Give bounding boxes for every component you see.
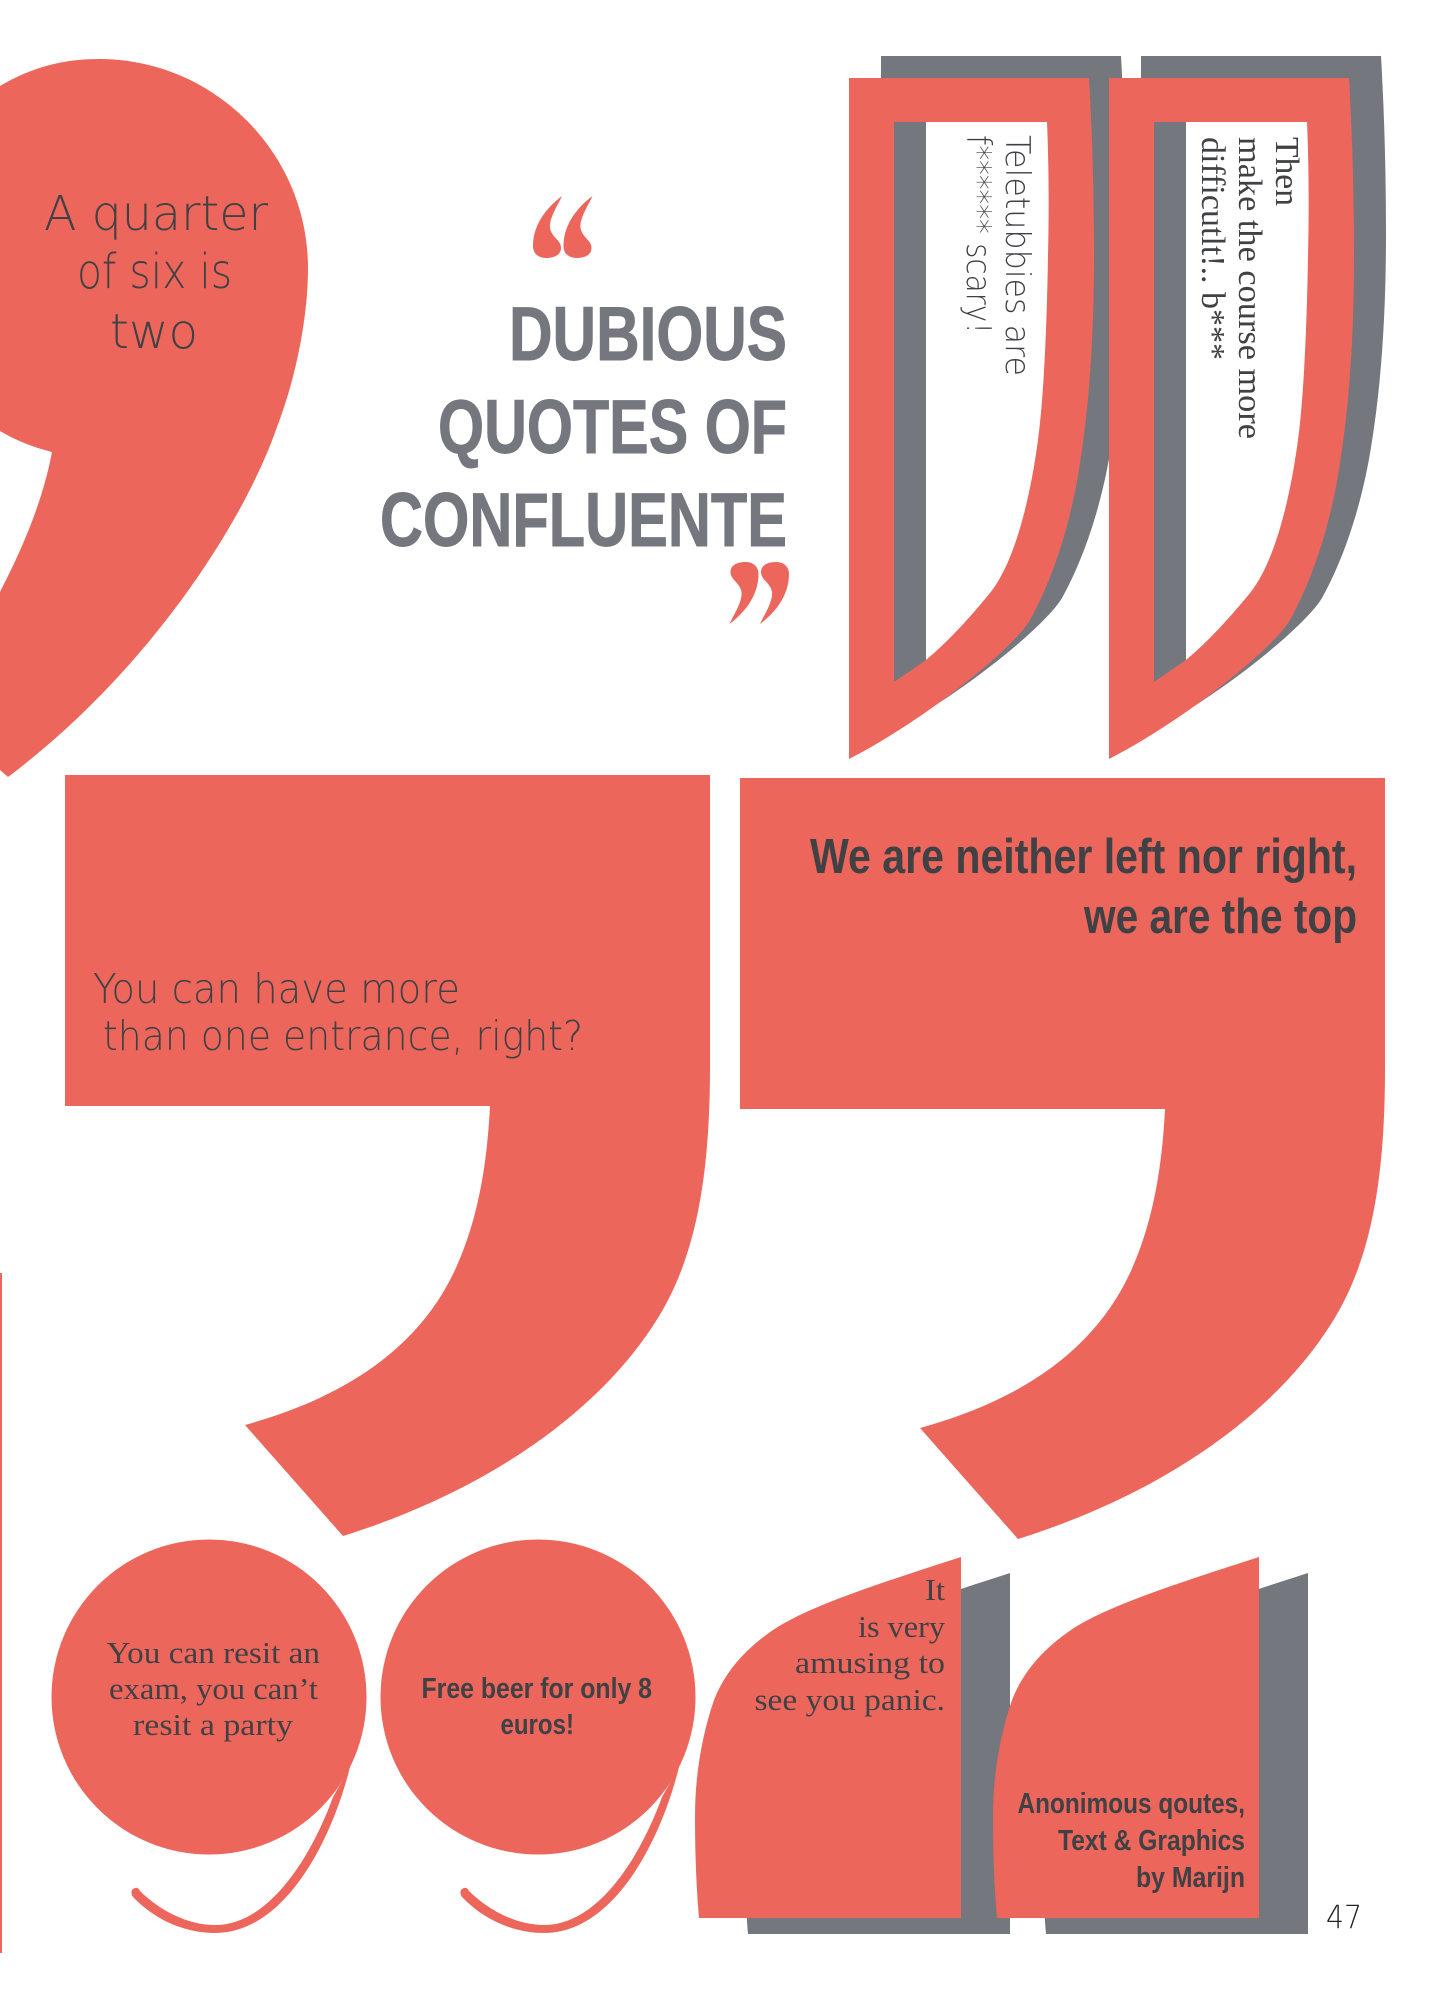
panel: outlined quote mark, course <box>1109 56 1386 759</box>
quote: a quarter of six is two <box>44 186 268 360</box>
panel: opening mark, credits <box>993 1557 1308 1934</box>
page number: 47 <box>1326 1898 1362 1936</box>
grey shadow shape <box>744 1573 1010 1934</box>
quote: free beer <box>422 1673 652 1741</box>
title text <box>380 292 787 563</box>
quote: more than one entrance <box>93 965 583 1060</box>
quote mark tail <box>131 1767 350 1933</box>
quote: make the course more difficult: make the course more <box>1231 137 1268 439</box>
panel: round quote, resit <box>52 1540 366 1933</box>
quote mark circle <box>380 1540 696 1854</box>
grey shadow shape <box>881 56 1126 737</box>
comma shape <box>740 778 1385 1539</box>
quote: a quarter of six is two: of six is <box>77 244 232 300</box>
left edge line <box>0 1273 2 1953</box>
credits text: Text & Graphics <box>1058 1825 1245 1857</box>
big comma shape <box>0 59 308 777</box>
panel: big comma with quote <box>0 59 308 777</box>
panel: round quote, free beer <box>380 1540 696 1933</box>
icon: opening quote mark <box>533 196 592 258</box>
quote: resit a party: exam, you can’t <box>109 1671 318 1706</box>
quote: make the course more difficult: Then <box>1268 137 1305 206</box>
quote: teletubbies: Teletubbies are <box>997 135 1037 376</box>
title text: DUBIOUS <box>509 292 787 377</box>
quote: more than one entrance: You can have more <box>93 965 460 1013</box>
quote: see you panic: see you panic. <box>754 1682 945 1717</box>
quote: free beer: euros! <box>500 1709 574 1741</box>
red outlined shape <box>1109 78 1354 759</box>
grey shadow shape <box>1042 1573 1308 1934</box>
quote: more than one entrance: than one entrance, right? <box>103 1012 583 1060</box>
quote mark tail <box>460 1767 679 1933</box>
red outlined shape <box>849 78 1094 759</box>
quote: teletubbies: f****** scary! <box>958 135 998 334</box>
red shape <box>993 1557 1259 1918</box>
icon: closing quote mark <box>730 562 789 624</box>
credits text <box>1018 1788 1245 1894</box>
quote: see you panic: is very <box>858 1609 946 1644</box>
credits text: by Marijn <box>1136 1862 1245 1894</box>
quote: see you panic: amusing to <box>795 1645 945 1680</box>
panel: large comma, left nor right <box>740 778 1385 1539</box>
quote: resit a party: resit a party <box>133 1707 294 1742</box>
credits text: Anonimous qoutes, <box>1018 1788 1245 1820</box>
quote: neither left nor right: we are the top <box>1083 890 1357 944</box>
quote: resit a party <box>106 1635 321 1742</box>
comma shape <box>65 775 710 1536</box>
red shape <box>695 1557 961 1918</box>
quote: teletubbies <box>958 135 1037 376</box>
quote: see you panic <box>754 1572 946 1717</box>
quote: resit a party: You can resit an <box>106 1635 321 1670</box>
quote: a quarter of six is two: two <box>110 304 198 360</box>
title block <box>380 196 789 624</box>
quote: make the course more difficult: difficutlt!.. b*** <box>1194 137 1231 360</box>
grey shadow shape <box>1141 56 1386 737</box>
title text: QUOTES OF <box>438 385 787 470</box>
panel: large comma, entrance <box>65 775 710 1536</box>
quote: a quarter of six is two: A quarter <box>44 186 268 242</box>
quote mark circle <box>52 1540 366 1854</box>
title text: CONFLUENTE <box>380 478 787 563</box>
panel: outlined quote mark, teletubbies <box>849 56 1126 759</box>
quote: neither left nor right <box>810 830 1357 944</box>
panel: opening mark, panic <box>695 1557 1010 1934</box>
quote: see you panic: It <box>925 1572 945 1607</box>
quote: free beer: Free beer for only 8 <box>422 1673 652 1705</box>
quote: make the course more difficult <box>1194 137 1305 439</box>
